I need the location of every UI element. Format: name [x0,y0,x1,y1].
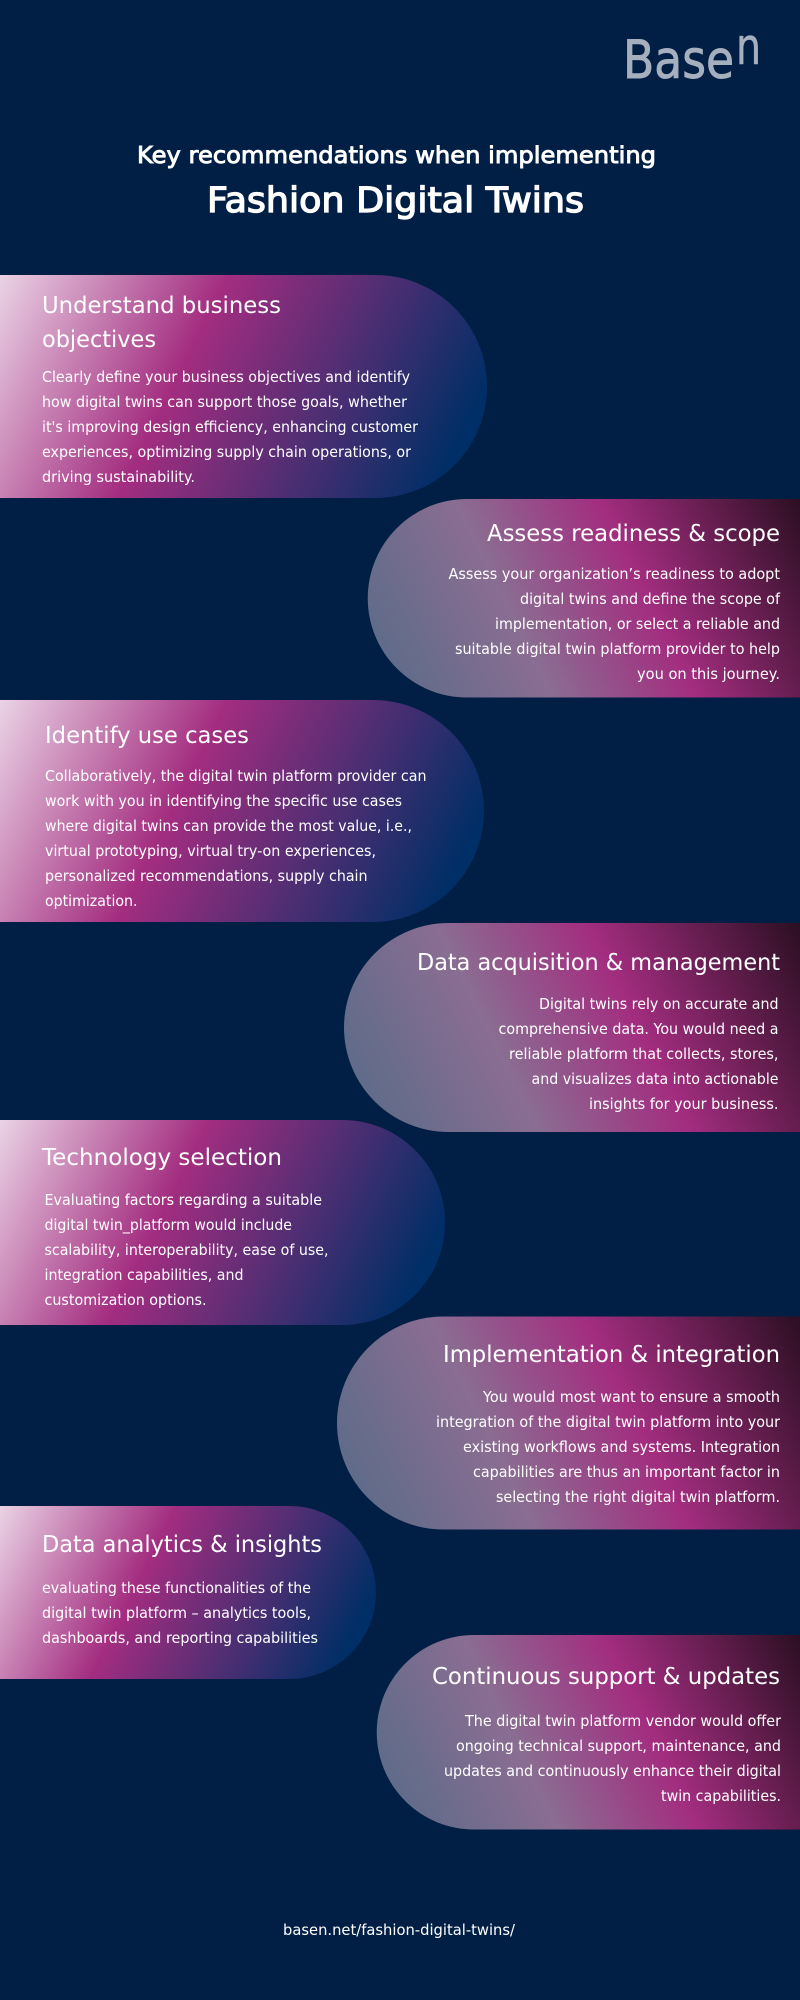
title: Key recommendations when implementing [137,141,656,169]
text block: data analytics and insights: evaluating these functionalities of the [42,1580,311,1597]
text block: continuous support and updates: twin capabilities. [661,1788,781,1805]
text block: data acquisition and management: reliable platform that collects, stores, [509,1046,778,1063]
text block: identify use cases: personalized recommendations, supply chain [45,868,368,885]
panel: assess readiness and scope [368,499,800,698]
text block: technology selection: customization options. [44,1292,206,1309]
text block: implementation and integration: capabilities are thus an important factor in [473,1464,780,1481]
text block: understand business objectives: experiences, optimizing supply chain operations, or [42,444,412,461]
panel: data analytics and insights [0,1506,376,1679]
text block: technology selection [44,1192,328,1309]
text block: understand business objectives: Clearly define your business objectives and identify [42,369,410,386]
footer url: basen.net/fashion-digital-twins/ [283,1922,515,1939]
text block: identify use cases: work with you in identifying the specific use cases [45,793,402,810]
text block: data analytics and insights [42,1580,318,1647]
text block: implementation and integration: integration of the digital twin platform into your [436,1414,781,1431]
text block: understand business objectives: it's improving design efficiency, enhancing customer [42,419,419,436]
text block: data analytics and insights: dashboards, and reporting capabilities [42,1630,318,1647]
text block: implementation and integration [436,1389,781,1506]
text block: technology selection: Evaluating factors regarding a suitable [44,1192,322,1209]
text block: data acquisition and management [498,996,778,1113]
text block: implementation and integration: existing workflows and systems. Integration [463,1439,780,1456]
text block: continuous support and updates: The digital twin platform vendor would offer [464,1713,782,1730]
text block: continuous support and updates: updates and continuously enhance their digital [444,1763,781,1780]
heading: understand business objectives [42,293,281,353]
heading: understand business objectives: Understand business [42,293,281,319]
text block: data acquisition and management: and visualizes data into actionable [532,1071,778,1088]
text block: data acquisition and management: Digital twins rely on accurate and [539,996,778,1013]
text block: technology selection: digital twin_platform would include [44,1217,292,1234]
heading: assess readiness and scope: Assess readiness & scope [487,521,780,547]
heading: technology selection: Technology selection [41,1145,282,1171]
text block: technology selection: integration capabilities, and [44,1267,244,1284]
text block: identify use cases [45,768,426,910]
text block: continuous support and updates: ongoing technical support, maintenance, and [456,1738,781,1755]
text block: identify use cases: where digital twins can provide the most value, i.e., [45,818,412,835]
text block: assess readiness and scope: implementation, or select a reliable and [495,616,780,633]
text block: identify use cases: virtual prototyping, virtual try-on experiences, [45,843,376,860]
panel: understand business objectives [0,275,487,498]
heading: data analytics and insights: Data analytics & insights [42,1532,322,1558]
text block: continuous support and updates [444,1713,782,1805]
text block: identify use cases: optimization. [45,893,138,910]
text block: identify use cases: Collaboratively, the digital twin platform provider can [45,768,426,785]
panel: identify use cases [0,700,484,922]
text block: implementation and integration: You would most want to ensure a smooth [482,1389,780,1406]
text block: understand business objectives: driving sustainability. [42,469,195,486]
panel: technology selection [0,1120,445,1325]
heading: identify use cases: Identify use cases [45,723,249,749]
text block: understand business objectives [42,369,419,486]
text block: assess readiness and scope [448,566,781,683]
text block: understand business objectives: how digital twins can support those goals, whether [42,394,408,411]
text block: assess readiness and scope: suitable digital twin platform provider to help [455,641,780,658]
title: Fashion Digital Twins [207,181,584,221]
text block: technology selection: scalability, interoperability, ease of use, [44,1242,328,1259]
text block: implementation and integration: selecting the right digital twin platform. [496,1489,780,1506]
text block: assess readiness and scope: you on this journey. [637,666,780,683]
title [137,141,656,221]
logo: Basen: Base [623,30,734,91]
text block: assess readiness and scope: Assess your organization’s readiness to adopt [448,566,780,583]
heading: implementation and integration: Implementation & integration [443,1342,780,1368]
panel: implementation and integration [337,1316,800,1530]
heading: data acquisition and management: Data acquisition & management [417,950,780,976]
text block: data acquisition and management: insights for your business. [589,1096,778,1113]
heading: continuous support and updates: Continuous support & updates [432,1664,780,1690]
heading: understand business objectives: objectives [42,327,156,353]
panel: data acquisition and management [344,923,800,1132]
logo: Basen: n [736,18,761,77]
panel: continuous support and updates [377,1635,800,1830]
text block: data acquisition and management: comprehensive data. You would need a [498,1021,778,1038]
text block: assess readiness and scope: digital twins and define the scope of [520,591,781,608]
text block: data analytics and insights: digital twin platform – analytics tools, [42,1605,311,1622]
